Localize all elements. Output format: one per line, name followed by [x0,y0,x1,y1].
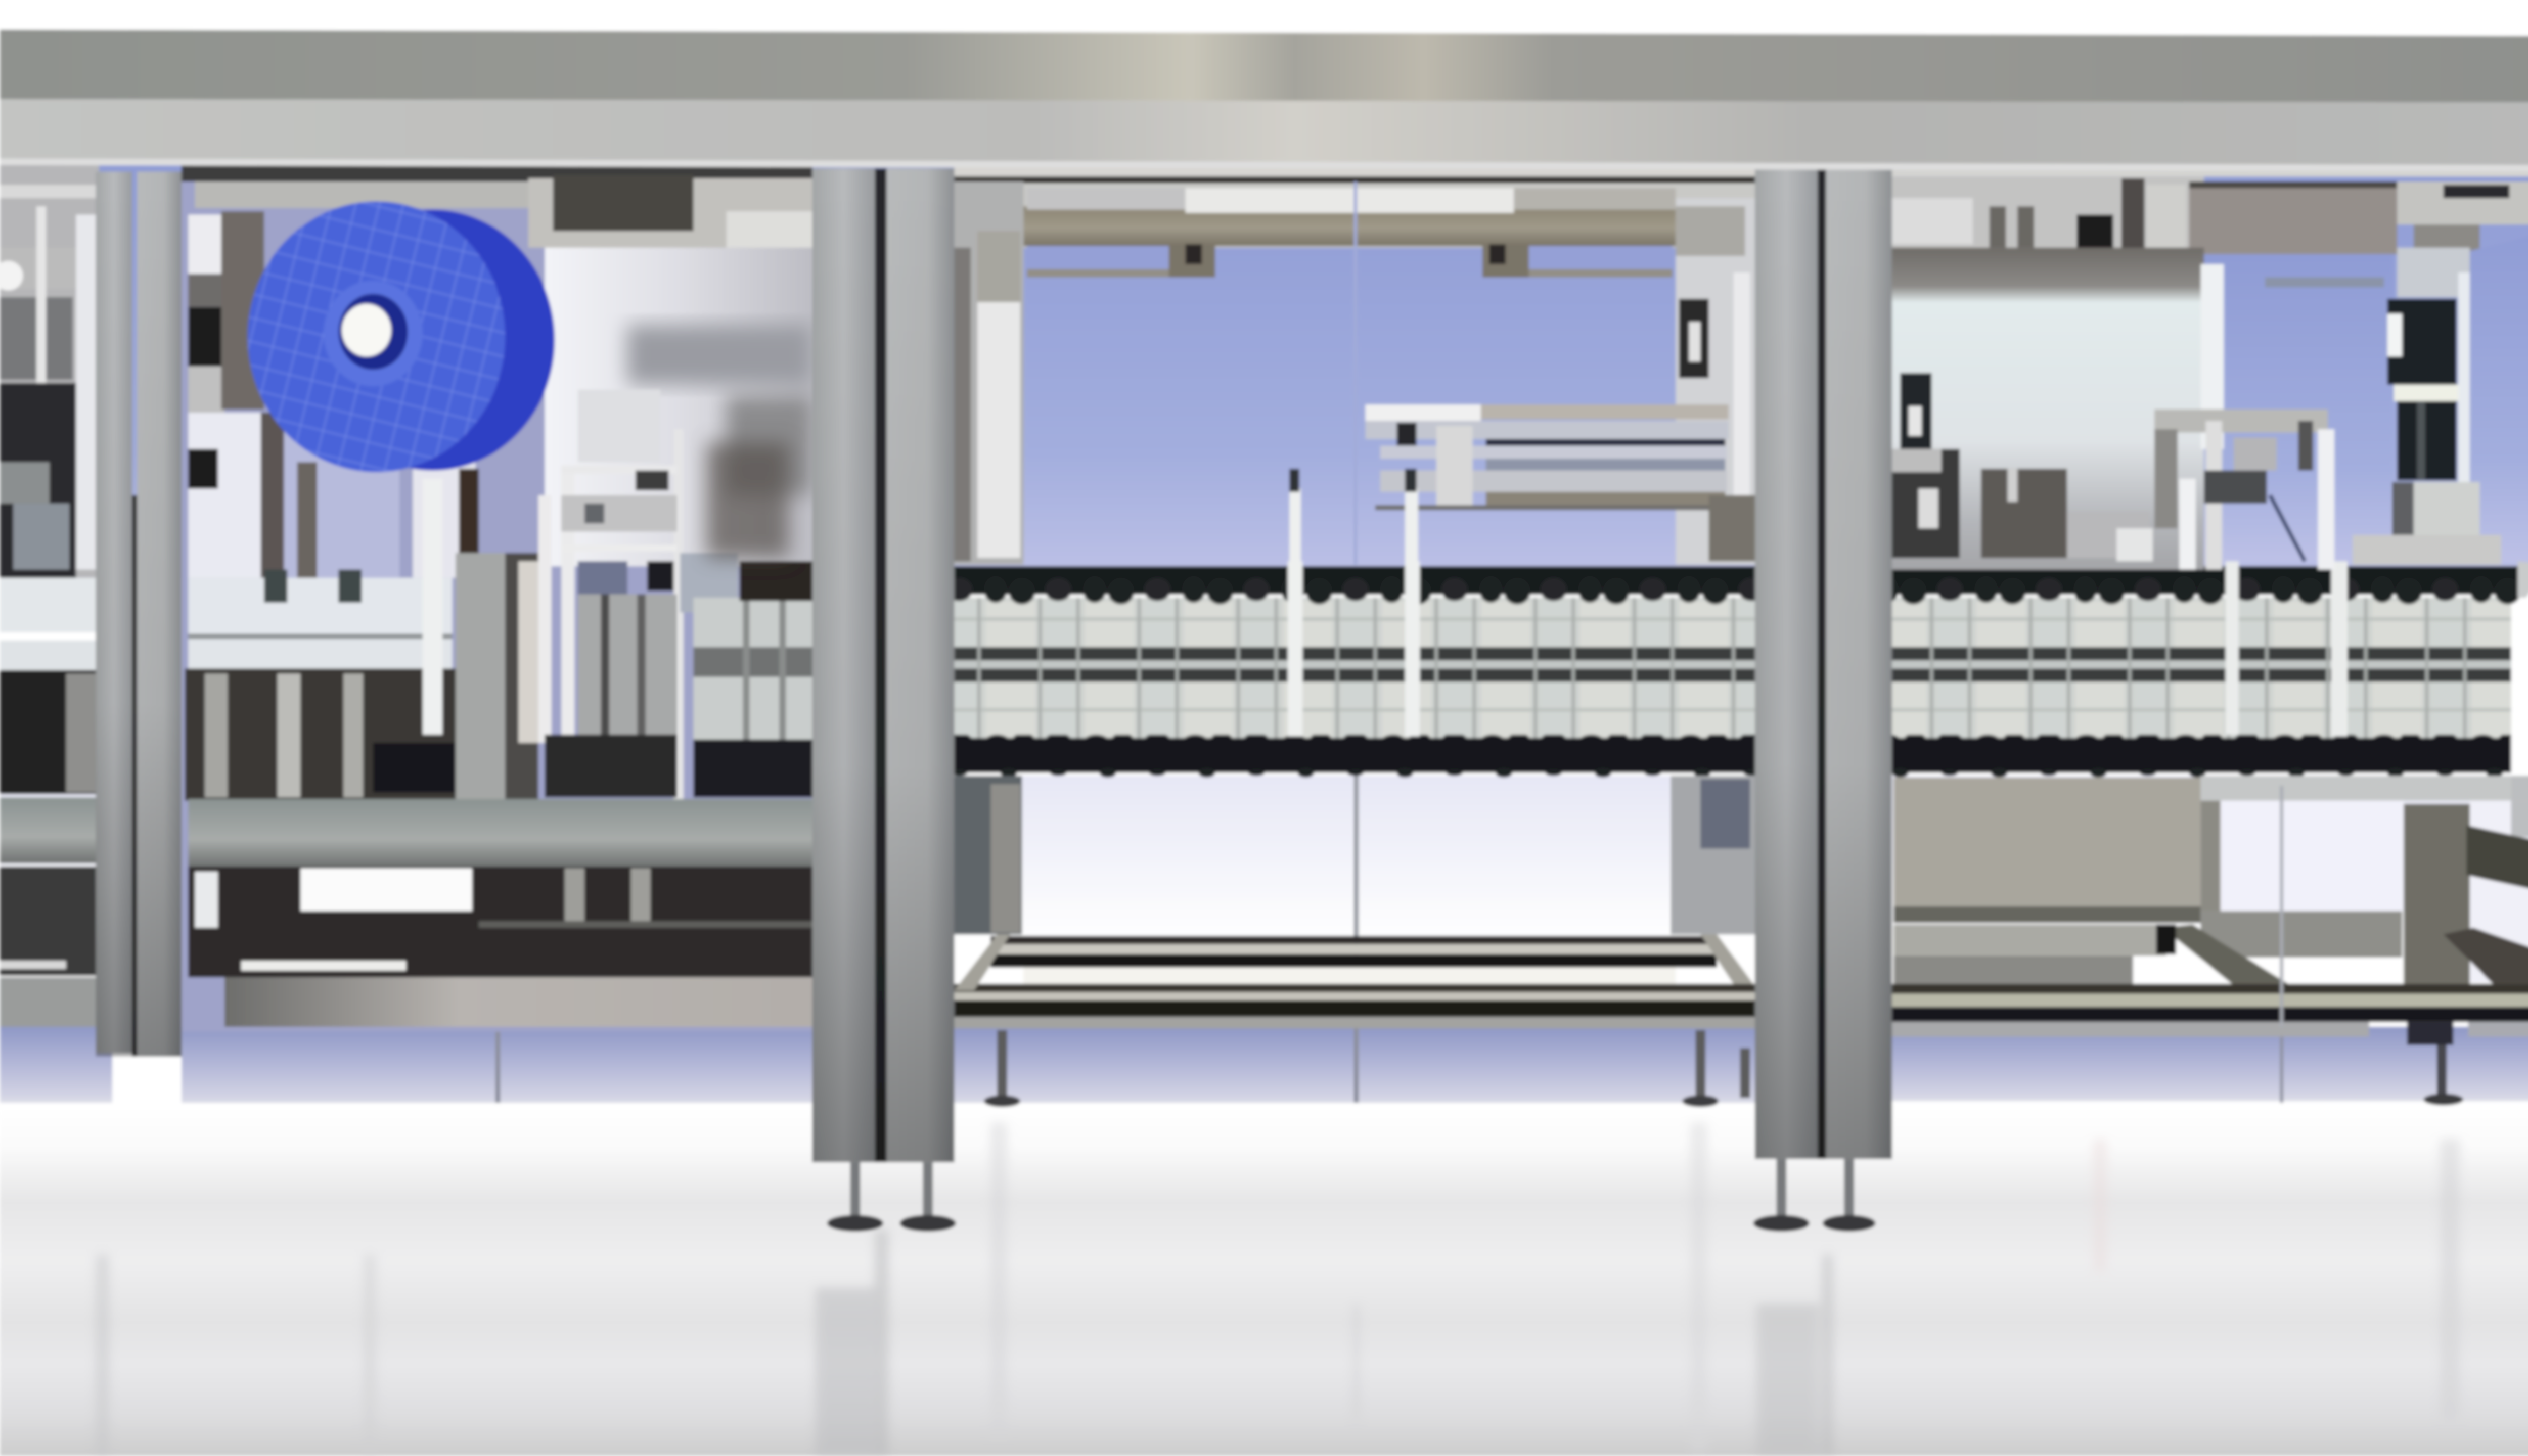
right bay: bottle handling mechanisms [1890,410,2501,570]
right bay: machine foot [2407,1022,2463,1105]
left bay: machine interior [182,165,812,1032]
center-right steel column pair with feet [1753,168,1892,1232]
right bay: lower cabinet and frame [1890,776,2528,1037]
top steel canopy [0,30,2528,172]
right bay: silver panel and overhead [1890,167,2528,570]
left steel column pair [96,172,182,1057]
lower lavender panels [0,1027,2528,1104]
far left machine bay [0,165,99,1027]
center bay: overhead beam and uprights [954,165,1755,565]
reflective floor [0,1057,2528,1456]
center bay: machine feet [984,1030,1750,1107]
left bay: infeed table and mechanisms [185,390,812,801]
center bay: upper transfer mechanism [1289,404,1755,736]
center bay: lower frame and rails [953,776,1755,1028]
conveyor with bottles [954,489,2528,779]
left bay: lower frame [188,799,812,1027]
center-left steel column pair with feet [812,168,956,1232]
background sky wall [0,165,2528,941]
icon: blue film spool [248,201,555,472]
right bay: motor and servo assembly [1900,272,2479,555]
